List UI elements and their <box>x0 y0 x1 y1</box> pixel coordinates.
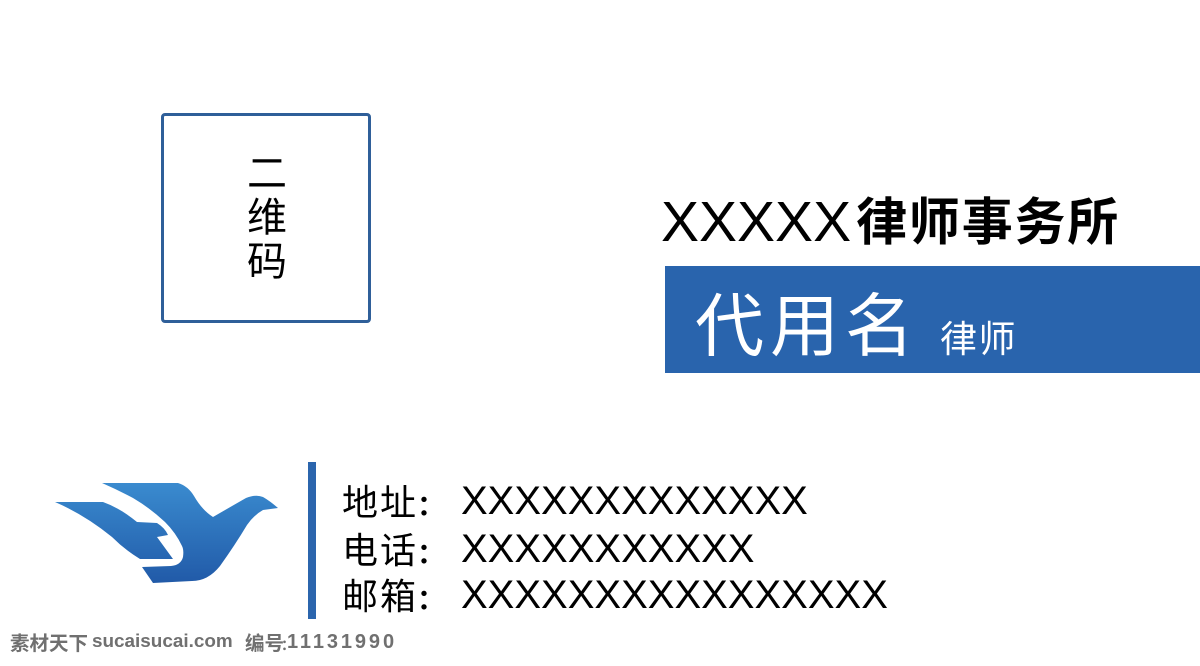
QR code placeholder box <box>161 113 371 323</box>
watermark: sucaisucai.com <box>92 631 233 652</box>
upper wing and body <box>102 483 278 583</box>
vertical divider <box>308 462 316 619</box>
icon: bird logo <box>55 483 278 583</box>
contact: phone value: XXXXXXXXXXX <box>461 527 754 571</box>
QR code placeholder label: 二维码 <box>247 141 287 287</box>
contact: email: 邮箱： <box>342 568 447 620</box>
blue name banner <box>665 266 1200 373</box>
lawyer title: 律师 <box>940 309 1017 363</box>
watermark: 编号： <box>245 627 295 656</box>
watermark: 素材天下 <box>10 627 88 656</box>
firm name heading: XXXXX律师事务所 <box>661 181 1120 255</box>
watermark <box>10 627 397 656</box>
contact: address value: XXXXXXXXXXXXX <box>461 479 808 523</box>
contact: phone: 电话： <box>342 522 447 574</box>
lawyer name: 代用名 <box>695 270 920 370</box>
contact: email value: XXXXXXXXXXXXXXXX <box>461 573 888 617</box>
lower wing <box>55 502 173 559</box>
contact: address: 地址： <box>342 474 447 526</box>
watermark: 11131990 <box>287 631 397 653</box>
